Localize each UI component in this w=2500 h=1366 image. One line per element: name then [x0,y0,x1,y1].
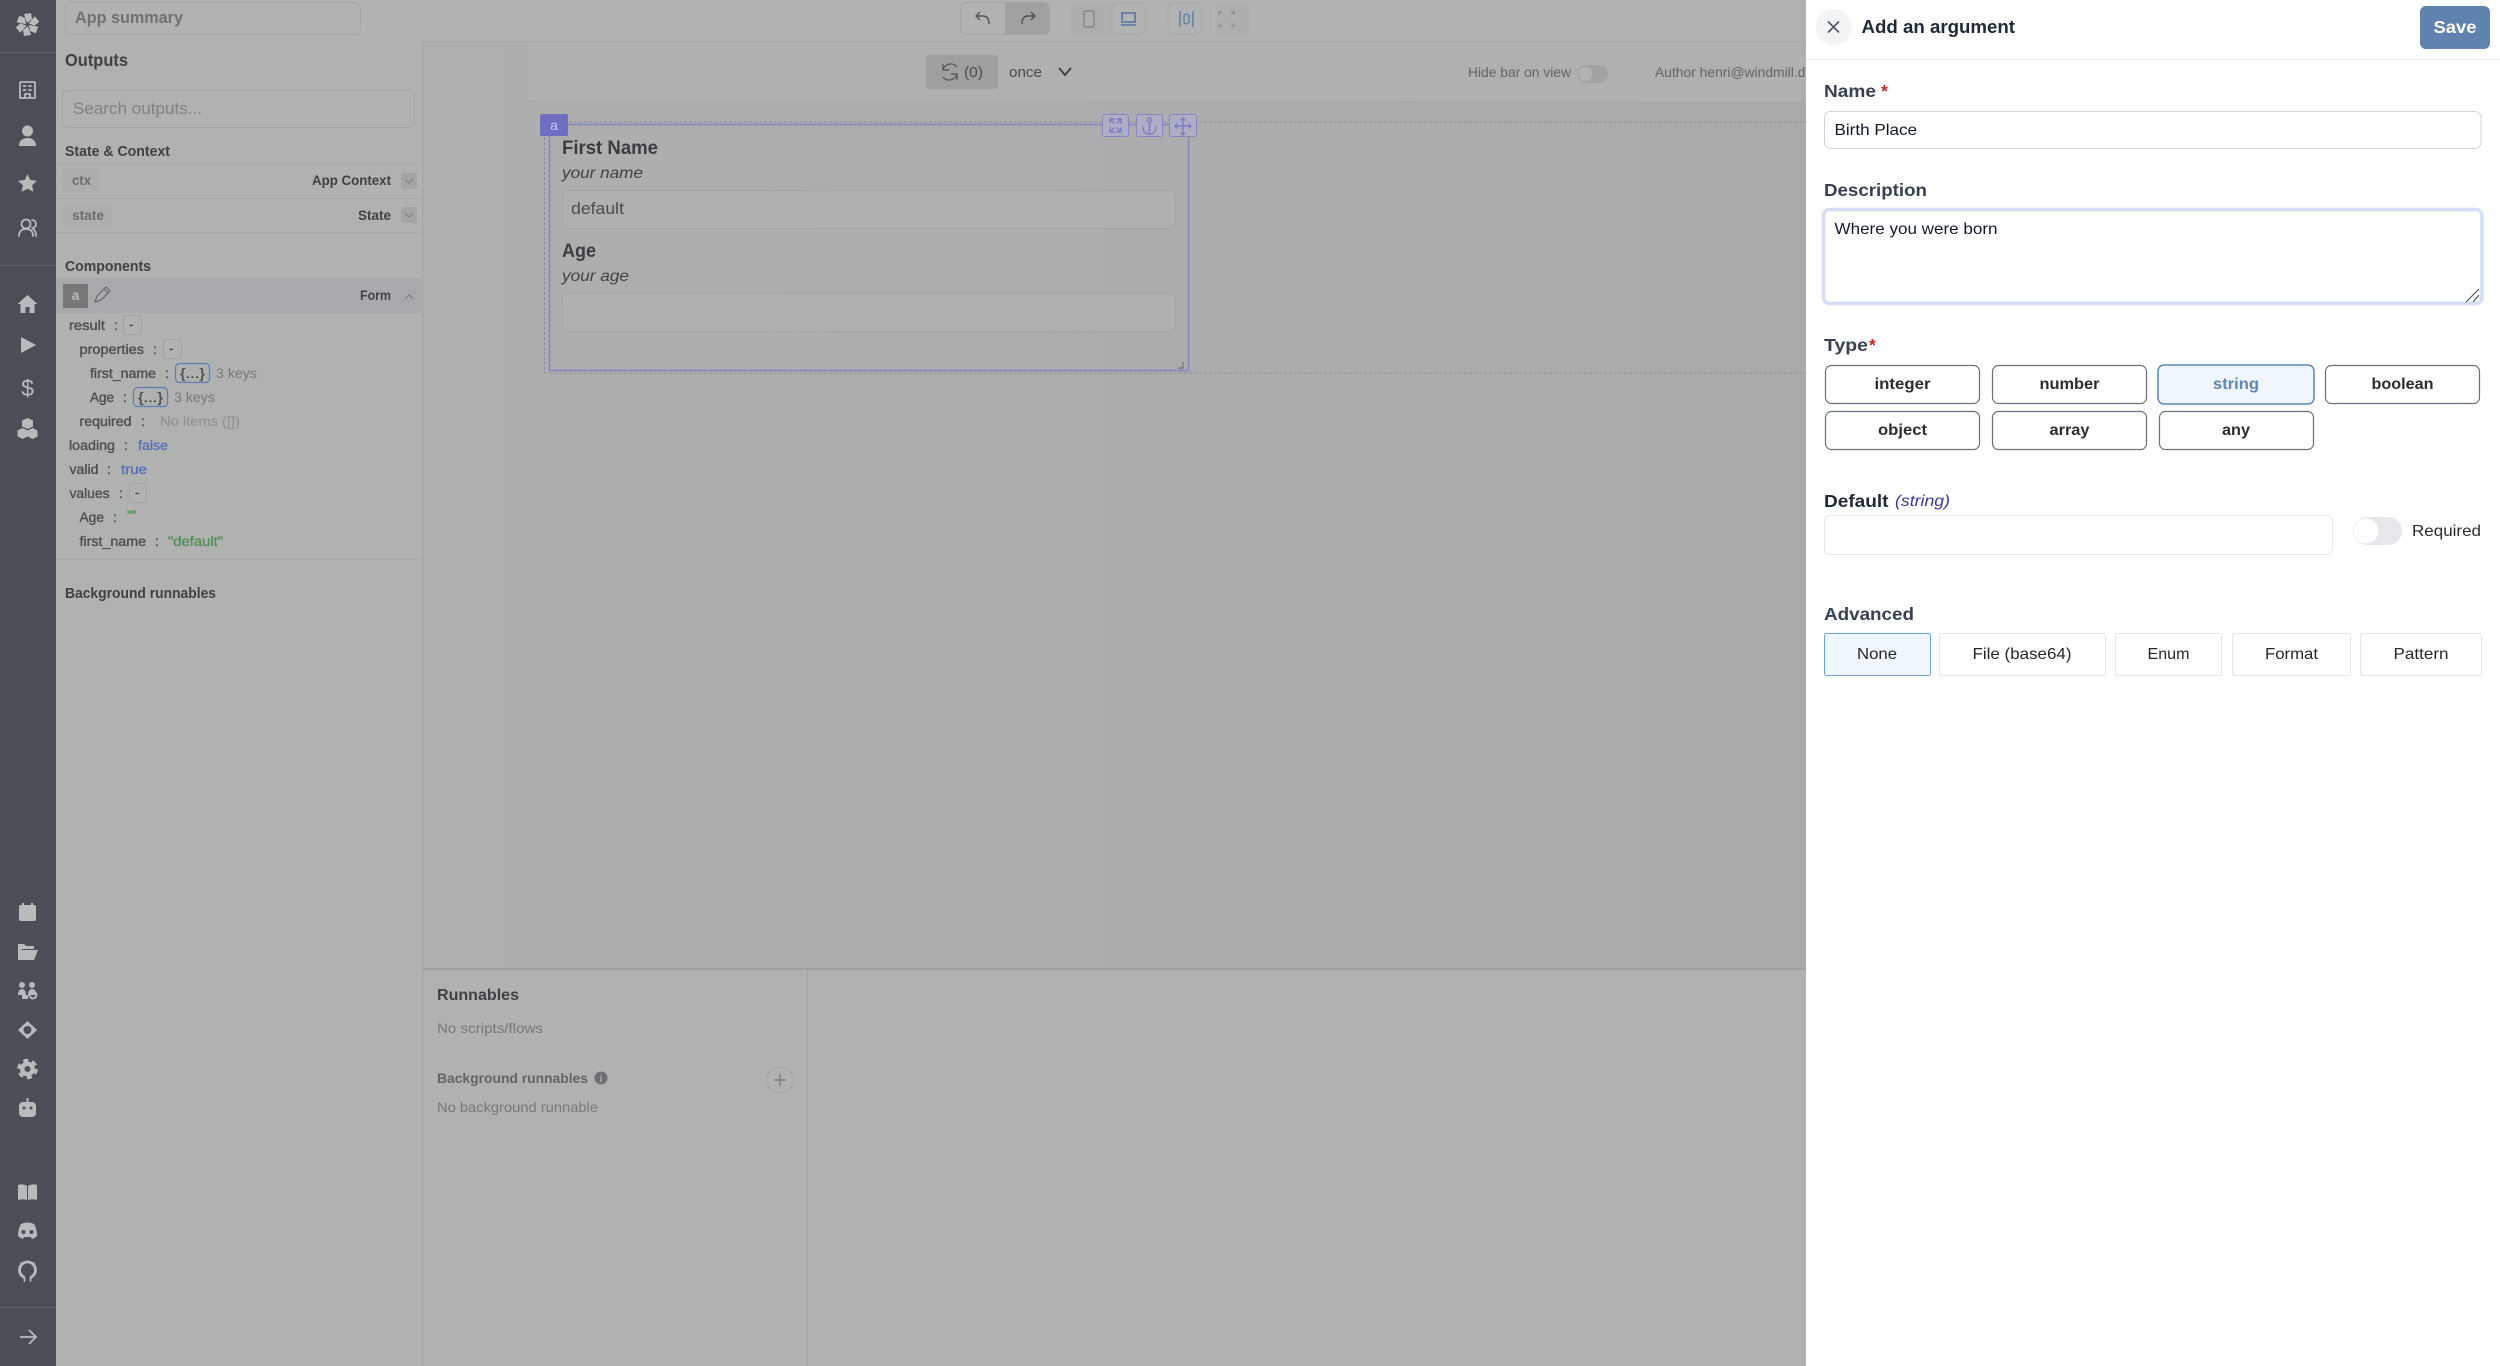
canvas background [423,41,1806,1366]
type selector: boolean [2372,376,2434,393]
close button [1816,9,1852,45]
form component row: a [72,288,80,303]
output tree: false [138,438,168,453]
type selector: object [1878,422,1928,439]
icon: play [21,337,36,353]
form component [540,114,1196,370]
output tree: true [121,462,147,477]
hide bar toggle [1468,64,1608,83]
icon: user [19,126,36,146]
output tree: - [129,317,134,332]
name field: Birth Place [1834,122,1917,139]
top toolbar [56,0,1806,42]
type selector: any [2222,422,2250,439]
output tree: : [124,438,128,453]
output tree: - [169,341,174,356]
icon: cubes [18,418,38,439]
advanced selector [1824,604,2482,676]
runnables panel [423,969,1806,1366]
icon: users cog [18,982,36,999]
output tree: {...} [138,390,164,405]
icon: discord [18,1222,37,1239]
sub toolbar [527,42,1820,102]
state and context section: ctx [72,172,91,188]
icon: github [20,1262,36,1282]
type selector: number [2040,376,2100,393]
outputs heading: Outputs [65,50,128,70]
icon: building [20,82,35,98]
icon: calendar [19,903,36,921]
age field: Age [562,240,596,262]
advanced selector: None [1857,646,1897,663]
save button [2420,6,2490,49]
component id badge [540,114,568,136]
first name field: First Name [562,137,658,159]
output tree: No items ([]) [160,414,240,429]
icon: robot [19,1098,36,1117]
panel: add an argument drawer [1806,0,2500,1366]
no scripts message: No scripts/flows [437,1020,543,1036]
description field: Where you were born [1834,221,1998,238]
drawer header [1806,6,2500,60]
output tree: 3 keys [216,366,257,381]
advanced selector: File (base64) [1972,646,2072,663]
form component row: Form [360,287,391,303]
output tree: : [153,342,157,357]
layout width buttons [1168,3,1250,34]
state and context section: State & Context [65,144,170,160]
background runnables sub heading: i [600,1074,603,1085]
refresh interval select [1009,65,1071,81]
first name field [561,137,1176,228]
components heading: Components [65,259,151,275]
state and context section [56,144,423,232]
left outputs panel [56,41,423,1366]
advanced selector: Enum [2148,646,2190,663]
default field: Default [1824,491,1889,511]
required toggle [2353,517,2481,545]
icon: book [18,1184,37,1200]
output tree: loading [69,438,115,453]
name field [1824,81,2481,148]
default field [1824,491,2332,554]
state and context section: App Context [312,172,391,188]
type selector: integer [1874,376,1930,393]
refresh interval select: once [1009,65,1042,81]
refresh button [926,55,998,89]
first name field: default [571,200,624,218]
age field [561,240,1176,332]
undo redo buttons [960,2,1050,35]
icon: dollar: $ [21,375,34,401]
output tree: Age [80,510,104,525]
type selector: * [1869,335,1876,355]
output tree: - [135,485,140,500]
icon: windmill logo [15,13,40,36]
state and context section: State [358,207,391,223]
icon: eye [18,1021,37,1039]
output tree: values [70,486,110,501]
output tree: : [119,486,123,501]
advanced selector: Pattern [2394,646,2448,663]
type selector: array [2050,422,2090,439]
description field [1824,180,2482,304]
output tree: {...} [180,366,206,381]
description field: Description [1824,180,1927,200]
output tree: properties [80,342,144,357]
output tree: : [165,366,169,381]
name field: Name [1824,81,1876,101]
left navigation sidebar [0,0,56,1366]
output tree: : [141,414,145,429]
output tree: : [107,462,111,477]
output tree: : [155,534,159,549]
no background runnable message: No background runnable [437,1099,598,1115]
icon: gear [19,1060,36,1078]
component action icons [1102,114,1196,136]
icon: home [18,295,38,313]
advanced selector: Format [2265,646,2319,663]
runnables heading: Runnables [437,987,519,1004]
component id badge: a [550,117,558,133]
output tree: first_name [90,366,156,381]
resize handle [1178,362,1183,368]
output tree: result [69,318,105,333]
app summary input: App summary [75,8,184,27]
hide bar toggle: Hide bar on view [1468,64,1572,80]
type selector: Type [1824,335,1868,355]
drawer title: Add an argument [1862,17,2015,37]
output tree: "default" [168,534,223,549]
output tree: : [114,318,118,333]
type selector [1824,335,2480,450]
age field: your age [561,268,629,285]
icon: users [19,220,36,236]
refresh button: (0) [964,65,983,81]
advanced selector: Advanced [1824,604,1914,624]
output tree: "" [127,508,137,523]
add background runnable button [767,1067,793,1093]
output tree: Age [90,390,114,405]
author: Author henri@windmill.dev [1655,64,1820,80]
output tree: valid [70,462,98,477]
output tree: : [123,390,127,405]
background runnables sub heading: Background runnables [437,1070,588,1086]
device toggle buttons [1070,3,1146,34]
default field: (string) [1895,493,1950,510]
output tree: required [80,414,132,429]
app summary input [66,2,360,34]
save button: Save [2434,17,2477,37]
output tree: first_name [80,534,146,549]
background runnables heading: Background runnables [65,586,216,602]
form component row [56,278,422,313]
name field: * [1881,81,1888,101]
first name field: your name [561,165,643,182]
type selector: string [2213,376,2259,393]
icon: star [18,174,37,192]
app grid lines [544,122,1806,373]
search outputs input: Search outputs... [73,99,202,118]
icon: folder open [18,944,38,960]
icon: expand arrow [20,1330,36,1344]
output tree [56,316,423,560]
output tree: 3 keys [174,390,215,405]
search outputs input [62,90,414,128]
output tree: : [113,510,117,525]
state and context section: state [72,207,104,223]
required toggle: Required [2412,523,2481,540]
